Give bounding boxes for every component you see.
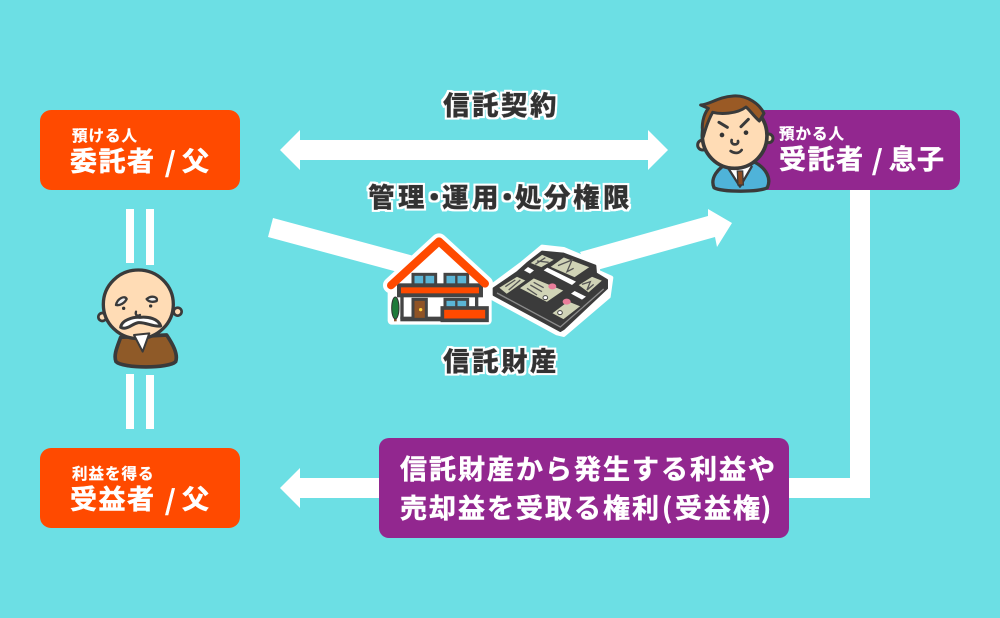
panel: beneficiary: 父 xyxy=(182,478,209,517)
icon: son character xyxy=(698,96,773,191)
panel: trustee: 息子 xyxy=(889,138,944,177)
arrow: management rights to trustee xyxy=(580,209,732,272)
panel: trustee: 預かる人 xyxy=(779,122,844,144)
panel: settlor: 父 xyxy=(182,140,209,179)
arrow: double-headed trust contract arrow xyxy=(280,130,668,170)
icon: stacks of banknotes xyxy=(489,247,611,335)
icon: father character xyxy=(98,270,182,367)
panel: beneficial rights: 売却益を受取る権利(受益権) xyxy=(400,487,771,526)
panel: settlor: / xyxy=(165,141,175,180)
arrow: entrustment from settlor to property xyxy=(268,218,425,278)
banknote details xyxy=(505,258,594,295)
panel: beneficial rights: 信託財産から発生する利益や xyxy=(400,448,775,487)
panel: trustee: 受託者 xyxy=(779,138,863,177)
heading: trust property: 信託財産 xyxy=(443,340,556,379)
panel: settlor xyxy=(40,110,240,190)
heading: trust contract: 信託契約 xyxy=(443,84,556,123)
connector: settlor equals beneficiary lines xyxy=(126,209,154,429)
heading: management rights: 管理・運用・処分権限 xyxy=(368,176,630,215)
banknote straps xyxy=(524,267,586,300)
banknote bundles xyxy=(498,254,604,320)
icon: house xyxy=(388,241,492,325)
panel: beneficiary: 受益者 xyxy=(70,478,154,517)
panel: trustee xyxy=(750,110,960,190)
panel: beneficiary: 利益を得る xyxy=(72,462,154,484)
panel: trustee: / xyxy=(872,139,882,178)
panel: beneficiary xyxy=(40,448,240,528)
arrow: connector from trustee to beneficiary xyxy=(280,190,870,508)
panel: beneficial rights xyxy=(379,438,789,538)
panel: settlor: 委託者 xyxy=(70,140,154,179)
panel: beneficiary: / xyxy=(165,479,175,518)
panel: settlor: 預ける人 xyxy=(72,124,138,146)
